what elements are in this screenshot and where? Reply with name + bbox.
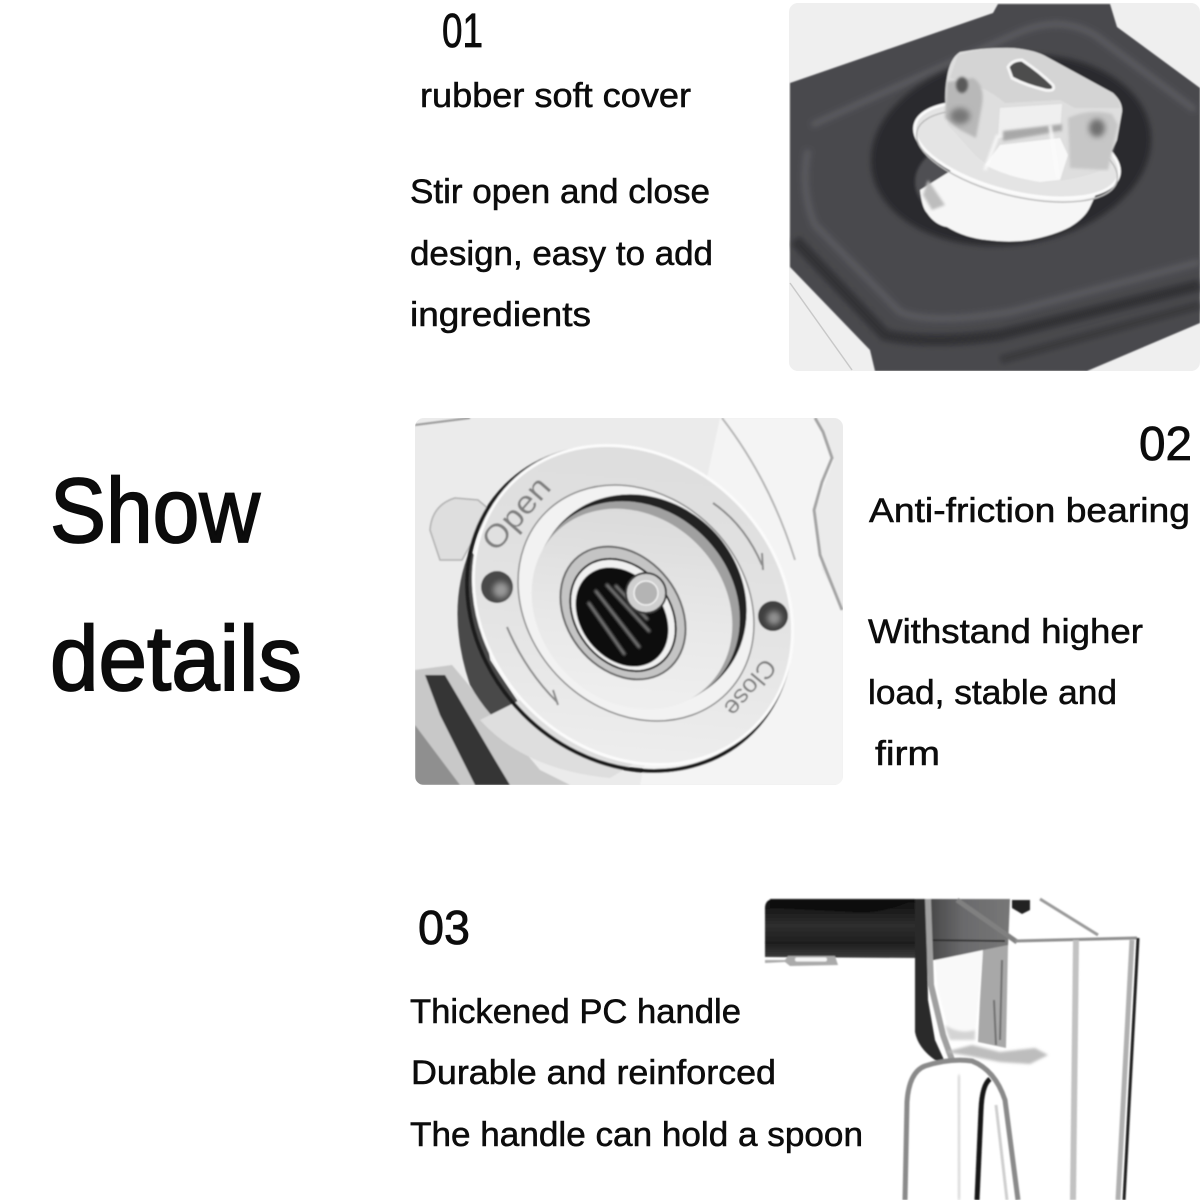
feature description 01: design, easy to add — [410, 235, 713, 273]
engraved arrow — [507, 627, 558, 705]
heading: Show details: Show — [50, 460, 261, 562]
feature description 02: load, stable and — [868, 674, 1117, 712]
feature title: rubber soft cover: rubber soft cover — [420, 77, 691, 115]
lid clip — [765, 956, 838, 966]
number 02: 02 — [1139, 418, 1192, 471]
lower-left base detail — [415, 665, 570, 785]
outer ring edge band — [456, 552, 518, 715]
number 03: 03 — [418, 902, 470, 955]
feature title: Anti-friction bearing: Anti-friction bearing — [869, 492, 1190, 530]
handle window — [934, 949, 984, 961]
recess — [870, 53, 1153, 248]
jug top diagonal rim — [957, 900, 1017, 942]
section 03 text — [410, 902, 863, 1154]
cap side tab left — [945, 78, 983, 138]
dark rubber lid — [790, 4, 1200, 371]
section 01 text — [410, 5, 713, 334]
cap front — [985, 138, 1068, 182]
handle box — [930, 898, 1011, 961]
cap side tab right — [1068, 112, 1118, 170]
photo: rubber lid with clear cap — [789, 3, 1200, 371]
clear cap body — [944, 46, 1124, 151]
section 02 text — [868, 418, 1192, 773]
heading: Show details: details — [50, 608, 302, 710]
feature description 02: firm — [875, 735, 940, 773]
engraved label Close: Close — [718, 653, 782, 722]
feature description 03 — [410, 993, 863, 1154]
feature description 02: Withstand higher — [868, 613, 1143, 651]
feature description 03: The handle can hold a spoon — [410, 1116, 863, 1154]
heading: Show details — [50, 460, 302, 710]
jug top rim — [1015, 938, 1137, 941]
screw hole left — [481, 571, 513, 603]
feature description 02 — [868, 613, 1143, 773]
handle grip loop — [905, 1060, 1018, 1200]
engraved label Open: Open — [474, 469, 558, 558]
ring dark outline — [464, 450, 788, 774]
bearing hole — [558, 544, 688, 682]
side lug — [430, 498, 490, 560]
cap top slot — [1008, 60, 1054, 90]
handle dark edge — [915, 899, 945, 1062]
photo: anti-friction bearing disc — [415, 418, 843, 785]
handle right wall — [978, 945, 1008, 1048]
black lid band — [765, 899, 920, 958]
feature description 03: Durable and reinforced — [411, 1054, 776, 1092]
white opening — [920, 165, 1098, 242]
jug right wall — [1124, 938, 1138, 1200]
shaft bead — [626, 573, 666, 613]
photo: jug handle — [765, 899, 1138, 1200]
engraved arrow — [713, 503, 763, 570]
jug inner line — [1073, 940, 1076, 1200]
inner plate — [532, 508, 734, 708]
feature description 01 — [410, 173, 713, 334]
black grip line — [977, 1079, 990, 1200]
cap top face — [950, 48, 1120, 108]
feature description 01: Stir open and close — [410, 173, 710, 211]
feature description 01: ingredients — [410, 296, 591, 334]
screw hole right — [758, 601, 788, 631]
handle lower bridge — [945, 1045, 1048, 1064]
feature description 03: Thickened PC handle — [410, 993, 741, 1031]
inner plate recess — [516, 484, 756, 722]
lid knob — [1012, 900, 1030, 914]
number 01: 01 — [442, 5, 483, 58]
dark crescent — [550, 493, 748, 691]
ring face — [470, 444, 794, 765]
grip inner shade — [958, 1075, 960, 1200]
clear cap flange — [912, 102, 1122, 196]
